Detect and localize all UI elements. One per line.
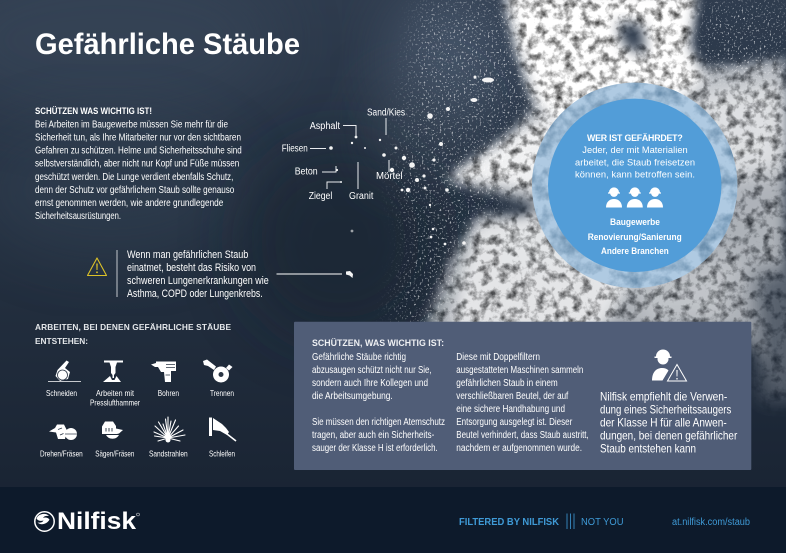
work activities section: [35, 322, 236, 458]
panel recommendation: Nilfisk empfiehlt die Verwen-: [600, 390, 727, 404]
panel column 1: sondern auch Ihre Kollegen und: [312, 378, 428, 389]
tagline: FILTERED BY NILFISK: [459, 517, 559, 528]
risk text: arbeitet, die Staub freisetzen: [575, 157, 695, 167]
icon: three workers: [606, 187, 663, 208]
activity: Presslufthammer: [90, 360, 140, 408]
panel background: [294, 322, 751, 470]
activity: Bohren: Bohren: [158, 389, 179, 398]
intro body: geschützt werden. Die Lunge verdient ebenfalls Schutz,: [35, 172, 233, 183]
activity: Schneiden: Schneiden: [46, 389, 77, 398]
activity: Presslufthammer: Arbeiten mit: [96, 389, 135, 398]
label: Sand/Kies: Sand/Kies: [367, 108, 405, 118]
website url: at.nilfisk.com/staub: [672, 517, 751, 528]
affected industries: Andere Branchen: [601, 246, 669, 256]
risk heading: WER IST GEFÄHRDET?: [587, 133, 683, 143]
activity: Schleifen: Schleifen: [209, 450, 235, 458]
panel column 2: [456, 352, 589, 454]
callout divider: [116, 250, 118, 297]
panel: protection info: [294, 322, 751, 470]
affected industries: [588, 217, 682, 256]
intro heading: SCHÜTZEN WAS WICHTIG IST!: [35, 106, 152, 116]
panel column 1: abzusaugen schützt nicht nur Sie,: [312, 365, 432, 376]
callout text: Asthma, COPD oder Lungenkrebs.: [127, 288, 263, 300]
label: Ziegel: Ziegel: [309, 191, 332, 202]
label: Granit: Granit: [349, 191, 374, 202]
label: Beton: Beton: [295, 166, 318, 178]
logo: Nilfisk: Nilfisk: [57, 508, 137, 535]
activity: Schleifen: [209, 418, 236, 458]
panel column 2: verschließbaren Beutel, der auf: [456, 391, 569, 402]
outer ring: [530, 80, 740, 290]
icon: worker with warning: [652, 350, 686, 381]
activity: Schneiden: [46, 360, 81, 398]
activity: Trennen: [203, 360, 234, 398]
intro body: denn der Schutz vor gefährlichem Staub sollte genauso: [35, 185, 234, 196]
logo: Nilfisk: [35, 508, 139, 535]
activity: Presslufthammer: Presslufthammer: [90, 398, 140, 408]
label: Asphalt: Asphalt: [310, 121, 340, 132]
panel column 1: tragen, aber auch ein Sicherheits-: [312, 430, 434, 441]
footer band: [0, 487, 786, 553]
callout text: schweren Lungenerkrankungen wie: [127, 275, 269, 287]
activity: Drehen/Fräsen: [40, 424, 83, 458]
risk text: können, kann betroffen sein.: [575, 170, 695, 180]
activity: Sandstrahlen: [149, 417, 188, 458]
panel column 2: nachdem er aufgenommen wurde.: [456, 443, 582, 454]
intro body: Sicherheit tun, als Ihre Mitarbeiter nur vor den sichtbaren: [35, 132, 241, 144]
title: Gefährliche Stäube: [35, 28, 300, 61]
panel recommendation: dung eines Sicherheitssaugers: [600, 404, 731, 416]
activity: Bohren: [151, 362, 179, 398]
affected industries: Baugewerbe: [610, 217, 660, 227]
dust materials diagram: [282, 108, 405, 202]
label: Mörtel: Mörtel: [376, 171, 403, 182]
activity: Trennen: Trennen: [210, 389, 234, 398]
label: Fliesen: Fliesen: [282, 144, 308, 154]
section heading: [35, 322, 231, 346]
intro body: selbstverständlich, aber nicht nur Kopf und Füße müssen: [35, 158, 239, 170]
risk text: Jeder, der mit Materialien: [582, 145, 688, 155]
activity: Drehen/Fräsen: Drehen/Fräsen: [40, 450, 83, 458]
intro body: Gefahren zu schützen. Helme und Sicherheitsschuhe sind: [35, 146, 242, 156]
panel recommendation: dungen, bei denen gefährlicher: [600, 430, 737, 442]
panel recommendation: Staub entstehen kann: [600, 442, 696, 456]
panel recommendation: [600, 390, 737, 456]
panel column 1: Gefährliche Stäube richtig: [312, 352, 406, 363]
affected industries: Renovierung/Sanierung: [588, 232, 682, 242]
intro body: Bei Arbeiten im Baugewerbe müssen Sie mehr für die: [35, 120, 228, 130]
activity: Sägen/Fräsen: [95, 422, 135, 458]
callout text: [127, 249, 269, 300]
section heading: ARBEITEN, BEI DENEN GEFÄHRLICHE STÄUBE: [35, 322, 231, 332]
dust explosion: [329, 0, 786, 409]
panel column 2: Beutel verhindert, dass Staub austritt,: [456, 430, 589, 441]
panel column 2: eine sichere Handhabung und: [456, 404, 565, 415]
activity: Sandstrahlen: Sandstrahlen: [149, 450, 188, 458]
inner disc: [548, 99, 721, 272]
panel column 1: sauger der Klasse H ist erforderlich.: [312, 443, 438, 454]
panel heading: SCHÜTZEN, WAS WICHTIG IST:: [312, 338, 444, 348]
panel column 1: Sie müssen den richtigen Atemschutz: [312, 417, 445, 428]
panel column 2: gefährlichen Staub in einem: [456, 378, 558, 389]
callout leader line: [276, 273, 342, 275]
callout text: einatmet, besteht das Risiko von: [127, 262, 256, 274]
callout: lung risk warning: [88, 249, 342, 300]
panel recommendation: der Klasse H für alle Anwen-: [600, 416, 727, 430]
text block: intro: [35, 106, 242, 222]
panel column 2: Entsorgung ausgelegt ist. Dieser: [456, 417, 573, 428]
intro body: Sicherheitsausrüstungen.: [35, 211, 121, 222]
panel column 2: Diese mit Doppelfiltern: [456, 352, 540, 363]
panel column 1: die Arbeitsumgebung.: [312, 391, 393, 402]
risk text: [575, 145, 695, 180]
intro body: ernst genommen werden, wie andere grundlegende: [35, 198, 223, 209]
intro body: [35, 120, 242, 222]
tagline: NOT YOU: [581, 517, 624, 528]
panel column 2: ausgestatteten Maschinen sammeln: [456, 365, 583, 376]
activity: Sägen/Fräsen: Sägen/Fräsen: [95, 450, 135, 458]
circle: who is at risk: [530, 80, 740, 290]
icon: warning triangle: [88, 258, 106, 276]
callout text: Wenn man gefährlichen Staub: [127, 249, 248, 261]
section heading: ENTSTEHEN:: [35, 336, 88, 346]
panel column 1: [312, 352, 445, 454]
tagline: [459, 514, 624, 529]
